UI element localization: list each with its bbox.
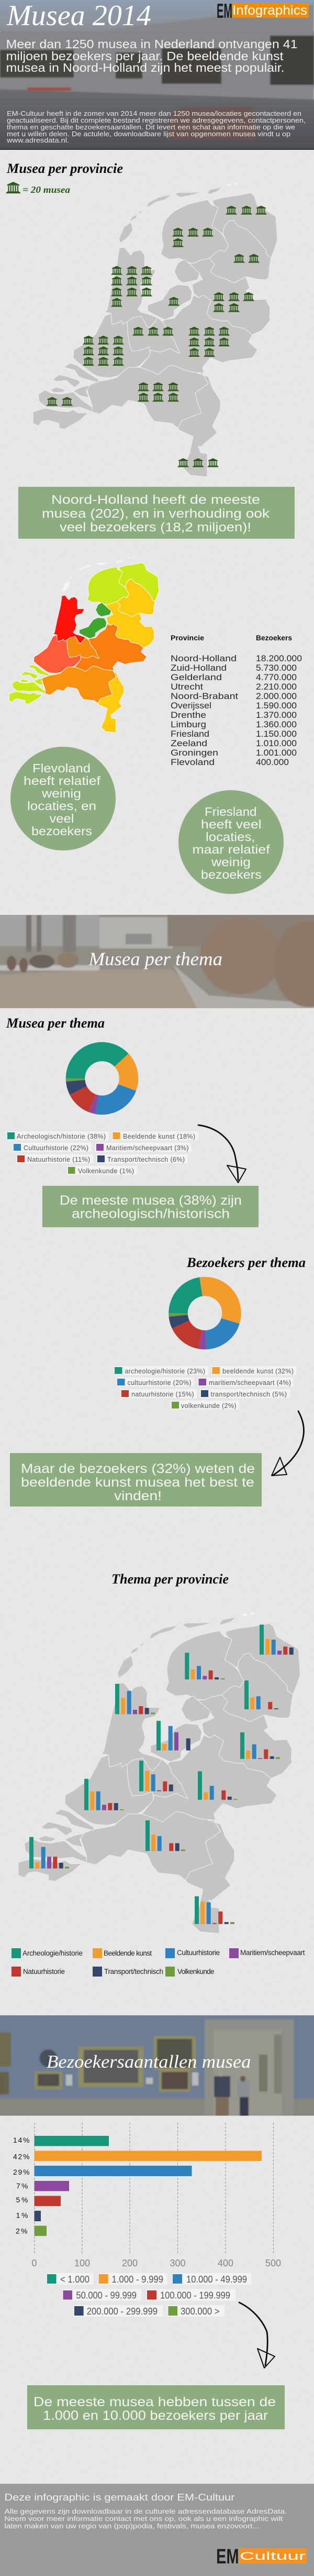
icons: Limburg	[178, 458, 219, 467]
bars: Gelderland	[198, 1771, 238, 1800]
bars: Flevoland	[156, 1721, 190, 1750]
legend: bezoekersaantallen: 200.000 - 299.999	[87, 2306, 158, 2317]
header panel	[0, 0, 314, 152]
axis labels: 200	[122, 2258, 138, 2268]
intro paragraph: thema en geschatte bezoekersaantallen. Dit levert een schat aan informatie op die we	[7, 123, 295, 131]
callout bubble: Friesland: bezoekers	[201, 868, 262, 881]
banner: musea per thema	[0, 912, 314, 1011]
callout bubble: Friesland	[178, 790, 284, 894]
table visitor numbers: 2.210.000	[256, 682, 297, 692]
callout bubble: Flevoland: heeft relatief	[24, 774, 101, 788]
intro paragraph: EM-Cultuur heeft in de zomer van 2014 meer dan 1250 musea/locaties gecontacteerd en	[7, 110, 301, 117]
callout bubble: Friesland: Friesland	[205, 805, 256, 818]
axis labels: 0	[31, 2258, 37, 2268]
legend: bezoekersaantallen: < 1.000	[60, 2274, 89, 2285]
arrow: to callout bezoekers	[239, 2302, 275, 2368]
legend: bezoekers per thema: transport/technisch (5%)	[210, 1391, 287, 1398]
table visitor numbers: 1.360.000	[256, 719, 297, 729]
banner photo background	[0, 912, 314, 1011]
table header: Provincie	[171, 634, 205, 642]
banner title: Musea per thema	[88, 948, 222, 969]
callout bubble: Flevoland	[10, 747, 116, 850]
callout bubble: Friesland: heeft veel	[201, 817, 262, 831]
table visitor numbers: 18.200.000	[256, 653, 302, 663]
heading: musea per thema: Musea per thema	[6, 1016, 105, 1031]
callout bubble: Flevoland: weinig	[41, 787, 81, 800]
legend: thema per provincie: Cultuurhistorie	[177, 1949, 220, 1957]
title: Musea 2014	[6, 0, 151, 32]
icons: Noord-Brabant	[138, 383, 179, 401]
percentage labels: 14%	[13, 2136, 29, 2144]
callout: 1.000 en 10.000 bezoekers: De meeste musea hebben tussen de	[33, 2395, 276, 2409]
table visitor numbers	[256, 653, 302, 767]
percentage labels: 1%	[16, 2211, 28, 2220]
footer heading: Deze infographic is gemaakt door EM-Cultuur	[4, 2492, 234, 2503]
legend: musea per thema: Maritiem/scheepvaart (3%)	[106, 1144, 188, 1152]
legend: thema per provincie: Archeologie/historie	[23, 1949, 83, 1957]
legend: bezoekers per thema: natuurhistorie (15%)	[131, 1391, 194, 1398]
bars: Zeeland	[29, 1837, 69, 1869]
icons: Overijssel	[214, 292, 254, 312]
logo EM Cultuur	[216, 2545, 307, 2568]
percentage labels: 7%	[16, 2181, 28, 2190]
donut chart: bezoekers per thema	[170, 1278, 240, 1349]
table province names: Noord-Brabant	[171, 691, 238, 701]
table visitor numbers: 400.000	[256, 757, 289, 767]
callout: Noord-Holland: musea (202), en in verhouding ook	[42, 507, 270, 521]
callout: 32% beeldende kunst: vinden!	[114, 1489, 162, 1503]
legend: bezoekersaantallen: 1.000 - 9.999	[112, 2274, 163, 2285]
percentage labels: 42%	[13, 2153, 29, 2161]
logo EM Infographics: Infographics	[232, 3, 307, 18]
legend: bezoekersaantallen: 10.000 - 49.999	[186, 2274, 247, 2285]
callout: 38% archeologisch	[42, 1186, 259, 1227]
callout bubble: Flevoland: veel	[49, 812, 74, 825]
intro headline: musea in Noord-Holland zijn het meest populair.	[6, 61, 285, 74]
axis labels: 400	[218, 2258, 233, 2268]
bars	[35, 2136, 262, 2236]
intro paragraph: geactualiseerd. Bij dit complete bestand registreren we adresgegevens, contactpersonen,	[7, 116, 306, 124]
legend: musea per thema: Archeologisch/historie (38%)	[17, 1133, 106, 1140]
table province names: Gelderland	[171, 672, 222, 682]
arrow: to callout 32%	[272, 1411, 304, 1476]
intro paragraph: www.adresdata.nl.	[6, 136, 69, 144]
axis labels: 300	[170, 2258, 186, 2268]
legend: bezoekers per thema: cultuurhistorie (20%)	[128, 1379, 192, 1387]
legend: bezoekersaantallen: 300.000 >	[181, 2306, 219, 2317]
bar chart: bezoekersaantallen	[13, 2123, 281, 2268]
bars: Friesland	[185, 1653, 225, 1679]
table visitor numbers: 1.010.000	[256, 738, 297, 748]
table: bezoekers per provincie	[171, 634, 302, 767]
legend: musea per thema	[6, 1131, 198, 1175]
logo EM Infographics	[217, 0, 309, 23]
heading: musea per provincie: Musea per provincie	[6, 161, 123, 176]
intro headline	[6, 37, 297, 74]
table province names	[171, 653, 238, 767]
callout bubble: Flevoland: Flevoland	[32, 761, 91, 775]
legend: musea per thema: Transport/technisch (6%)	[107, 1156, 185, 1163]
table province names: Utrecht	[171, 682, 203, 692]
table visitor numbers: 5.730.000	[256, 663, 297, 673]
legend: thema per provincie: Transport/technisch	[104, 1968, 163, 1975]
legend: thema per provincie: Maritiem/scheepvaart	[240, 1949, 305, 1957]
bars: Noord-Holland	[115, 1684, 155, 1714]
footer text: Neem voor meer informatie contact met ons op, ook als u een infographic wilt	[4, 2515, 283, 2523]
table province names: Limburg	[171, 719, 206, 729]
callout: 38% archeologisch: archeologisch/historisch	[72, 1206, 230, 1221]
icons: Flevoland	[169, 297, 179, 306]
percentage labels	[13, 2136, 29, 2235]
callout: 32% beeldende kunst: beeldende kunst musea het best te	[21, 1475, 254, 1490]
percentage labels: 2%	[16, 2227, 27, 2235]
icons: Friesland	[173, 227, 214, 247]
table province names: Overijssel	[171, 701, 211, 711]
footer text	[4, 2507, 287, 2530]
callout: 32% beeldende kunst: Maar de bezoekers (32%) weten de	[21, 1461, 255, 1476]
legend: musea per thema: Cultuurhistorie (22%)	[24, 1144, 88, 1152]
table visitor numbers: 2.000.000	[256, 691, 297, 701]
intro headline: miljoen bezoekers per jaar. De beeldende kunst	[6, 49, 284, 63]
percentage labels: 5%	[16, 2196, 28, 2204]
bars: Zuid-Holland	[84, 1779, 124, 1810]
arrow: to callout 38%	[198, 1125, 246, 1183]
banner: bezoekersaantallen musea	[0, 2013, 314, 2118]
callout bubble: Flevoland: bezoekers	[31, 824, 92, 838]
map: museums per province	[33, 183, 277, 477]
intro paragraph	[6, 110, 306, 144]
grid lines	[35, 2123, 273, 2254]
gray province map	[33, 183, 277, 477]
callout: 1.000 en 10.000 bezoekers	[27, 2385, 285, 2429]
table province names: Zeeland	[171, 738, 207, 748]
icons: Zeeland	[47, 397, 72, 406]
legend: bezoekers per thema: archeologie/historie (23%)	[125, 1368, 205, 1375]
legend: 20 musea: = 20 musea	[23, 184, 70, 195]
callout: 32% beeldende kunst	[10, 1453, 262, 1507]
percentage labels: 29%	[13, 2168, 29, 2176]
bars: Drenthe	[244, 1680, 278, 1709]
callout: Noord-Holland: Noord-Holland heeft de meeste	[51, 493, 260, 507]
legend: bezoekers per thema: beeldende kunst (32%)	[222, 1368, 294, 1375]
banner title: Bezoekersaantallen musea	[47, 2051, 251, 2072]
icons: Utrecht	[133, 327, 174, 335]
table header: Bezoekers	[256, 634, 292, 642]
icons: Drenthe	[233, 254, 260, 263]
table province names: Flevoland	[171, 757, 215, 767]
callout bubble: Friesland: locaties,	[206, 830, 255, 844]
bars: Groningen	[260, 1624, 294, 1655]
table province names: Noord-Holland	[171, 653, 237, 663]
icons: Gelderland	[188, 327, 229, 357]
legend: thema per provincie: Natuurhistorie	[23, 1968, 65, 1975]
map: visitors per province (heat colours)	[9, 557, 159, 733]
legend: thema per provincie: Volkenkunde	[177, 1968, 215, 1975]
legend: musea per thema: Volkenkunde (1%)	[78, 1167, 134, 1175]
banner photo background	[0, 2013, 314, 2118]
intro headline: Meer dan 1250 musea in Nederland ontvangen 41	[6, 37, 297, 51]
callout bubble: Friesland: weinig	[211, 855, 251, 869]
axis labels	[31, 2258, 281, 2268]
heading: thema per provincie: Thema per provincie	[111, 1571, 229, 1587]
bars: Utrecht	[139, 1761, 173, 1791]
legend: musea per thema: Beeldende kunst (18%)	[123, 1133, 195, 1140]
table header	[171, 634, 292, 642]
map: thema per provincie	[18, 1612, 300, 1934]
footer text: laten maken van uw regio van (pop)podia, festivals, musea enzovoort...	[4, 2522, 259, 2530]
callout: 38% archeologisch: De meeste musea (38%) zijn	[60, 1193, 242, 1208]
logo EM Infographics: EM	[217, 0, 232, 23]
table visitor numbers: 1.150.000	[256, 729, 297, 739]
callout bubble: Flevoland: locaties, en	[27, 799, 96, 813]
legend: thema per provincie: Beeldende kunst	[104, 1949, 152, 1957]
header photo background	[0, 0, 314, 152]
callout: Noord-Holland	[18, 487, 295, 539]
legend: bezoekers per thema: volkenkunde (2%)	[181, 1402, 237, 1410]
footer text: Alle gegevens zijn downloadbaar in de culturele adressendatabase AdresData.	[4, 2507, 287, 2515]
intro paragraph: met u willen delen. De actulele, downloadbare lijst van opgenomen musea vindt u op	[7, 130, 290, 138]
table visitor numbers: 4.770.000	[256, 672, 297, 682]
axis labels: 500	[265, 2258, 281, 2268]
logo EM Cultuur: EM	[216, 2545, 239, 2568]
footer panel	[0, 2484, 314, 2576]
table province names: Groningen	[171, 748, 218, 758]
logo EM Cultuur: Cultuur	[240, 2550, 306, 2562]
table visitor numbers: 1.001.000	[256, 748, 297, 758]
icons: Zuid-Holland	[83, 335, 124, 366]
table province names: Zuid-Holland	[171, 663, 227, 673]
legend: 20 musea	[6, 182, 70, 195]
legend: bezoekers per thema: maritiem/scheepvaart (4%)	[209, 1379, 291, 1387]
gray base map	[18, 1612, 300, 1934]
callout: 1.000 en 10.000 bezoekers: 1.000 en 10.000 bezoekers per jaar	[43, 2408, 268, 2423]
legend: thema per provincie	[12, 1948, 305, 1977]
bars: Noord-Brabant	[145, 1820, 185, 1851]
legend: bezoekersaantallen: 50.000 - 99.999	[76, 2290, 137, 2300]
table visitor numbers: 1.590.000	[256, 701, 297, 711]
axis labels: 100	[74, 2258, 90, 2268]
legend: musea per thema: Natuurhistorie (11%)	[27, 1156, 90, 1163]
legend: bezoekersaantallen: 100.000 - 199.999	[160, 2290, 230, 2300]
heading: bezoekers per thema: Bezoekers per thema	[186, 1255, 306, 1270]
donut chart: musea per thema	[64, 1041, 140, 1116]
table visitor numbers: 1.370.000	[256, 710, 297, 720]
table province names: Drenthe	[171, 710, 206, 720]
callout bubble: Friesland: maar relatief	[193, 843, 270, 856]
icons: Groningen	[226, 205, 267, 215]
bars: Overijssel	[240, 1732, 280, 1759]
icons: Noord-Holland	[111, 266, 152, 307]
callout: Noord-Holland: veel bezoekers (18,2 miljoen)!	[60, 520, 251, 534]
legend: bezoekersaantallen	[47, 2273, 251, 2317]
legend: bezoekers per thema	[114, 1366, 296, 1410]
table province names: Friesland	[171, 729, 209, 739]
bars: Limburg	[195, 1896, 234, 1924]
